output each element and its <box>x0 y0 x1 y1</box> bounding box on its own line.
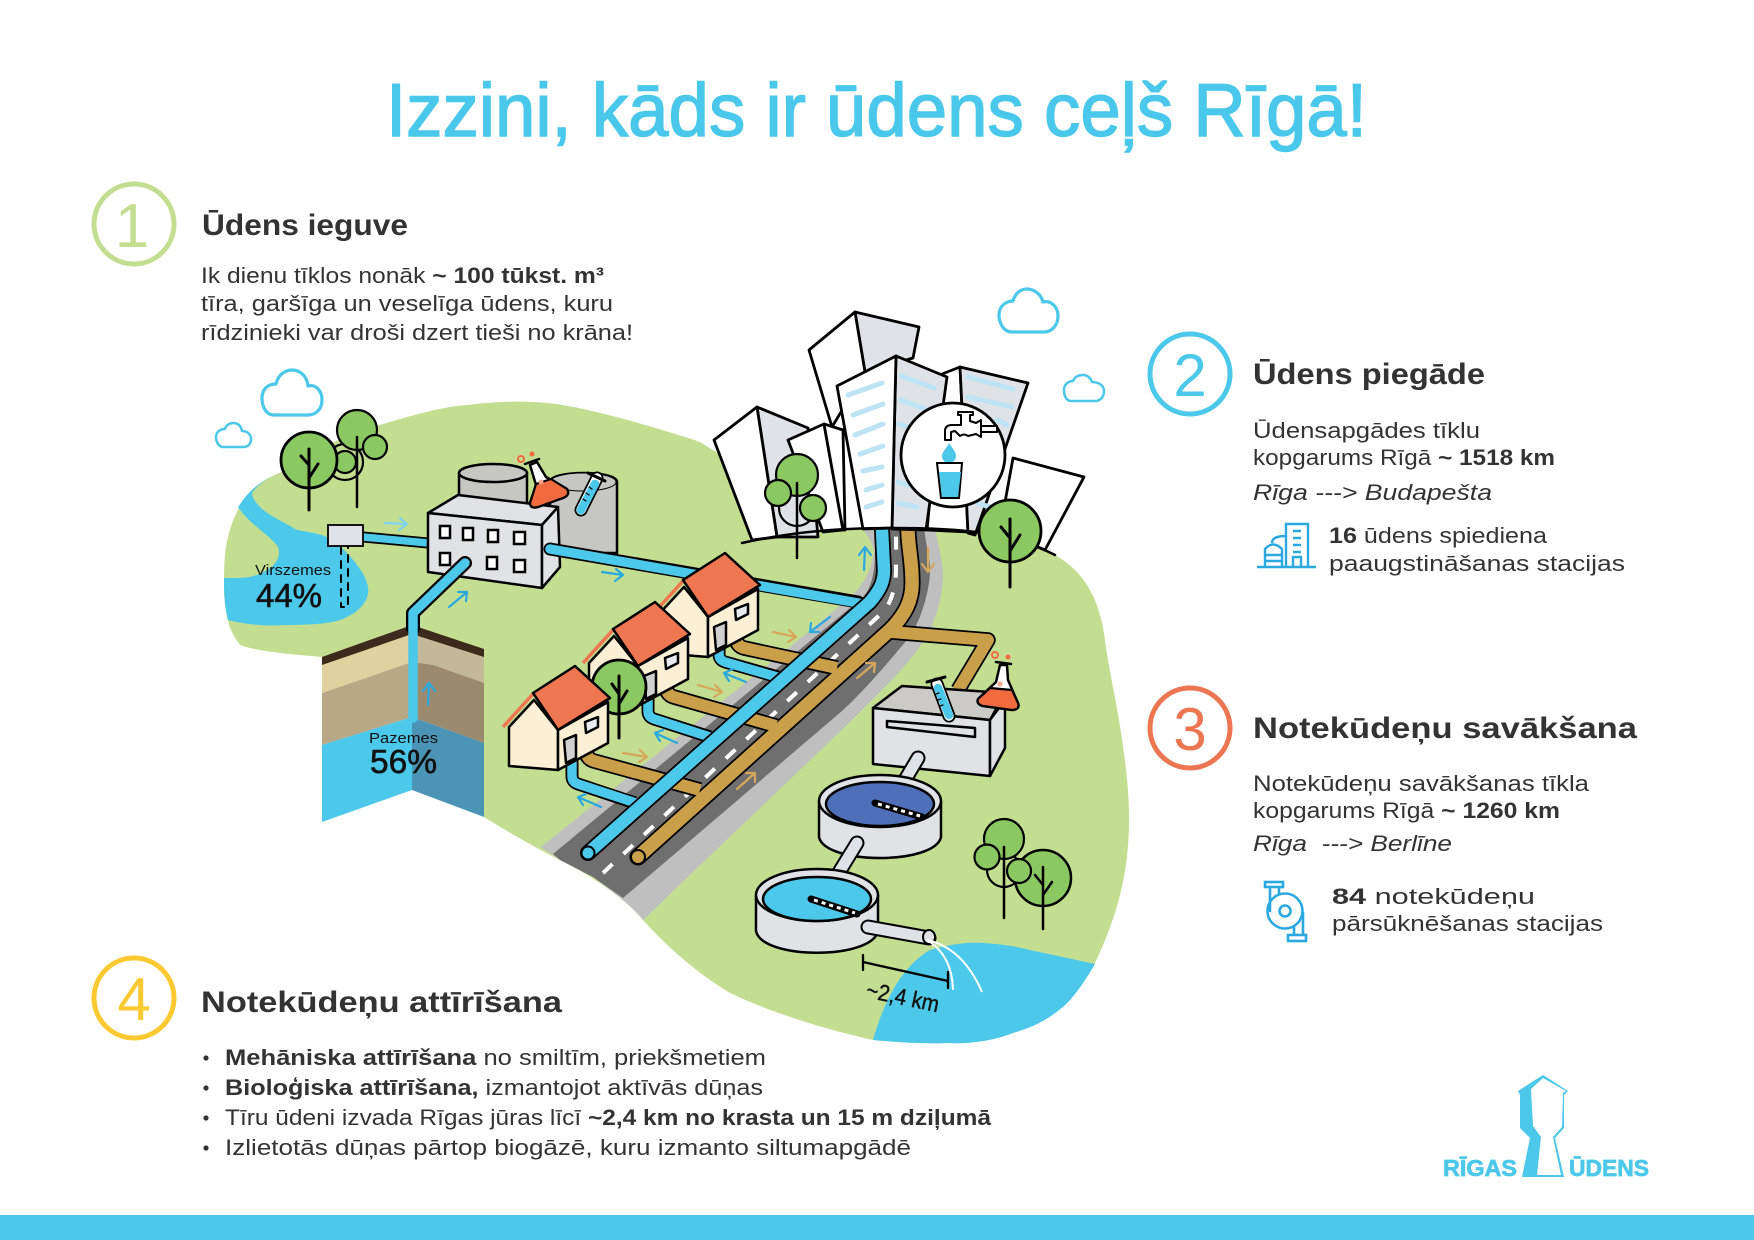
hill line <box>742 528 1055 555</box>
heading 1: Ūdens ieguve <box>202 209 408 242</box>
icon: tap <box>945 412 997 440</box>
heading 3: Notekūdeņu savākšana <box>1253 712 1637 745</box>
text: pressure stations: paaugstināšanas stacijas <box>1329 551 1625 576</box>
text block 1: Ik dienu tīklos nonāk ~ 100 tūkst. m³ <box>201 263 605 288</box>
pipe building to tank <box>902 758 918 785</box>
flask on factory <box>518 452 568 507</box>
intake station <box>328 525 428 607</box>
bullet list: Bioloģiska attīrīšana, izmantojot aktīvās dūņas <box>225 1075 763 1100</box>
bullet list <box>203 1045 992 1160</box>
label: groundwater share: 56% <box>370 743 437 780</box>
section 4 <box>94 958 992 1160</box>
icon: water drop <box>942 443 956 463</box>
trees at river <box>281 410 387 510</box>
icon: glass <box>937 463 962 498</box>
clouds <box>216 289 1104 447</box>
heading 4: Notekūdeņu attīrīšana <box>201 986 562 1019</box>
distance bar <box>863 955 948 988</box>
factory <box>428 495 560 588</box>
settling tank blue <box>819 775 941 858</box>
outflow streams <box>927 940 982 992</box>
logo: RĪGAS <box>1443 1155 1517 1181</box>
text block 3 <box>1253 771 1590 856</box>
house middle <box>583 602 690 706</box>
text: pump stations: pārsūknēšanas stacijas <box>1332 911 1603 936</box>
text block 2: Rīga ---> Budapešta <box>1253 480 1492 505</box>
section 1 <box>94 184 633 345</box>
icon: pump <box>1265 882 1306 941</box>
house bottom <box>503 666 610 770</box>
badge 2: 2 <box>1173 342 1207 409</box>
sea <box>873 943 1095 1043</box>
text: pump stations: 84 notekūdeņu <box>1332 884 1535 909</box>
logo: ŪDENS <box>1569 1155 1649 1181</box>
test tube on treatment building <box>927 677 949 716</box>
tanks behind factory <box>459 464 617 553</box>
land <box>224 402 1129 1043</box>
badge 1: 1 <box>115 192 149 261</box>
distance label: ~2,4 km <box>864 976 942 1017</box>
river and lake <box>224 472 368 625</box>
bullet list: Mehāniska attīrīšana no smiltīm, priekšmetiem <box>225 1045 766 1070</box>
city tree right <box>979 500 1041 587</box>
water pipes <box>550 530 884 860</box>
badge 2 <box>1150 334 1230 414</box>
section 2 <box>1150 334 1625 576</box>
treatment building <box>873 686 1005 776</box>
text block 1: rīdzinieki var droši dzert tieši no krāna! <box>201 320 633 345</box>
settling tank light blue <box>756 869 878 953</box>
flask on treatment building <box>978 652 1019 710</box>
bullet list: Tīru ūdeni izvada Rīgas jūras līcī ~2,4 km no krasta un 15 m dziļumā <box>225 1105 992 1130</box>
building windows <box>848 376 1013 507</box>
badge 1 <box>94 184 174 264</box>
text block 3: Rīga ---> Berlīne <box>1253 831 1452 856</box>
icon: buildings <box>1257 524 1316 567</box>
text block 2: Ūdensapgādes tīklu <box>1253 418 1480 443</box>
text block 1: tīra, garšīga un veselīga ūdens, kuru <box>201 291 613 316</box>
bullet list: Izlietotās dūņas pārtop biogāzē, kuru izmanto siltumapgādē <box>225 1135 911 1160</box>
text block 2 <box>1253 418 1555 505</box>
section 3 <box>1150 688 1637 941</box>
logo <box>1443 1075 1649 1181</box>
soil cross-section <box>322 625 484 822</box>
pipe between tanks <box>838 843 857 874</box>
label: groundwater share: Pazemes <box>369 730 438 747</box>
trees bottom right <box>974 819 1071 929</box>
footer bar <box>0 1215 1754 1240</box>
road <box>541 528 943 920</box>
test tube on factory <box>581 473 605 510</box>
city tree trunk <box>796 483 798 558</box>
badge 3 <box>1150 688 1230 768</box>
flow arrows <box>385 518 934 807</box>
text: pressure stations <box>1329 523 1625 576</box>
text: pump stations <box>1332 884 1603 936</box>
text: pressure stations: 16 ūdens spiediena <box>1329 523 1548 548</box>
text block 3: Notekūdeņu savākšanas tīkla <box>1253 771 1590 796</box>
house top <box>653 553 760 657</box>
label: surface water share <box>255 562 331 614</box>
badge 4: 4 <box>117 966 151 1033</box>
text block 2: kopgarums Rīgā ~ 1518 km <box>1253 445 1555 470</box>
label: surface water share: Virszemes <box>255 562 331 579</box>
text block 1 <box>201 263 633 345</box>
illustration: water cycle map <box>216 289 1129 1043</box>
text block 3: kopgarums Rīgā ~ 1260 km <box>1253 798 1560 823</box>
tap and glass circle <box>901 403 1005 507</box>
badge 4 <box>94 958 174 1038</box>
badge 3: 3 <box>1173 696 1207 763</box>
label: surface water share: 44% <box>256 577 322 614</box>
title: Izzini, kāds ir ūdens ceļš Rīgā! <box>386 68 1367 152</box>
groundwater pipe <box>413 563 465 718</box>
city tree left <box>765 454 826 526</box>
sewage pipes <box>586 530 988 864</box>
tree by houses <box>592 660 646 738</box>
heading 2: Ūdens piegāde <box>1253 358 1485 391</box>
city buildings <box>714 312 1084 550</box>
outflow pipe <box>868 927 935 944</box>
